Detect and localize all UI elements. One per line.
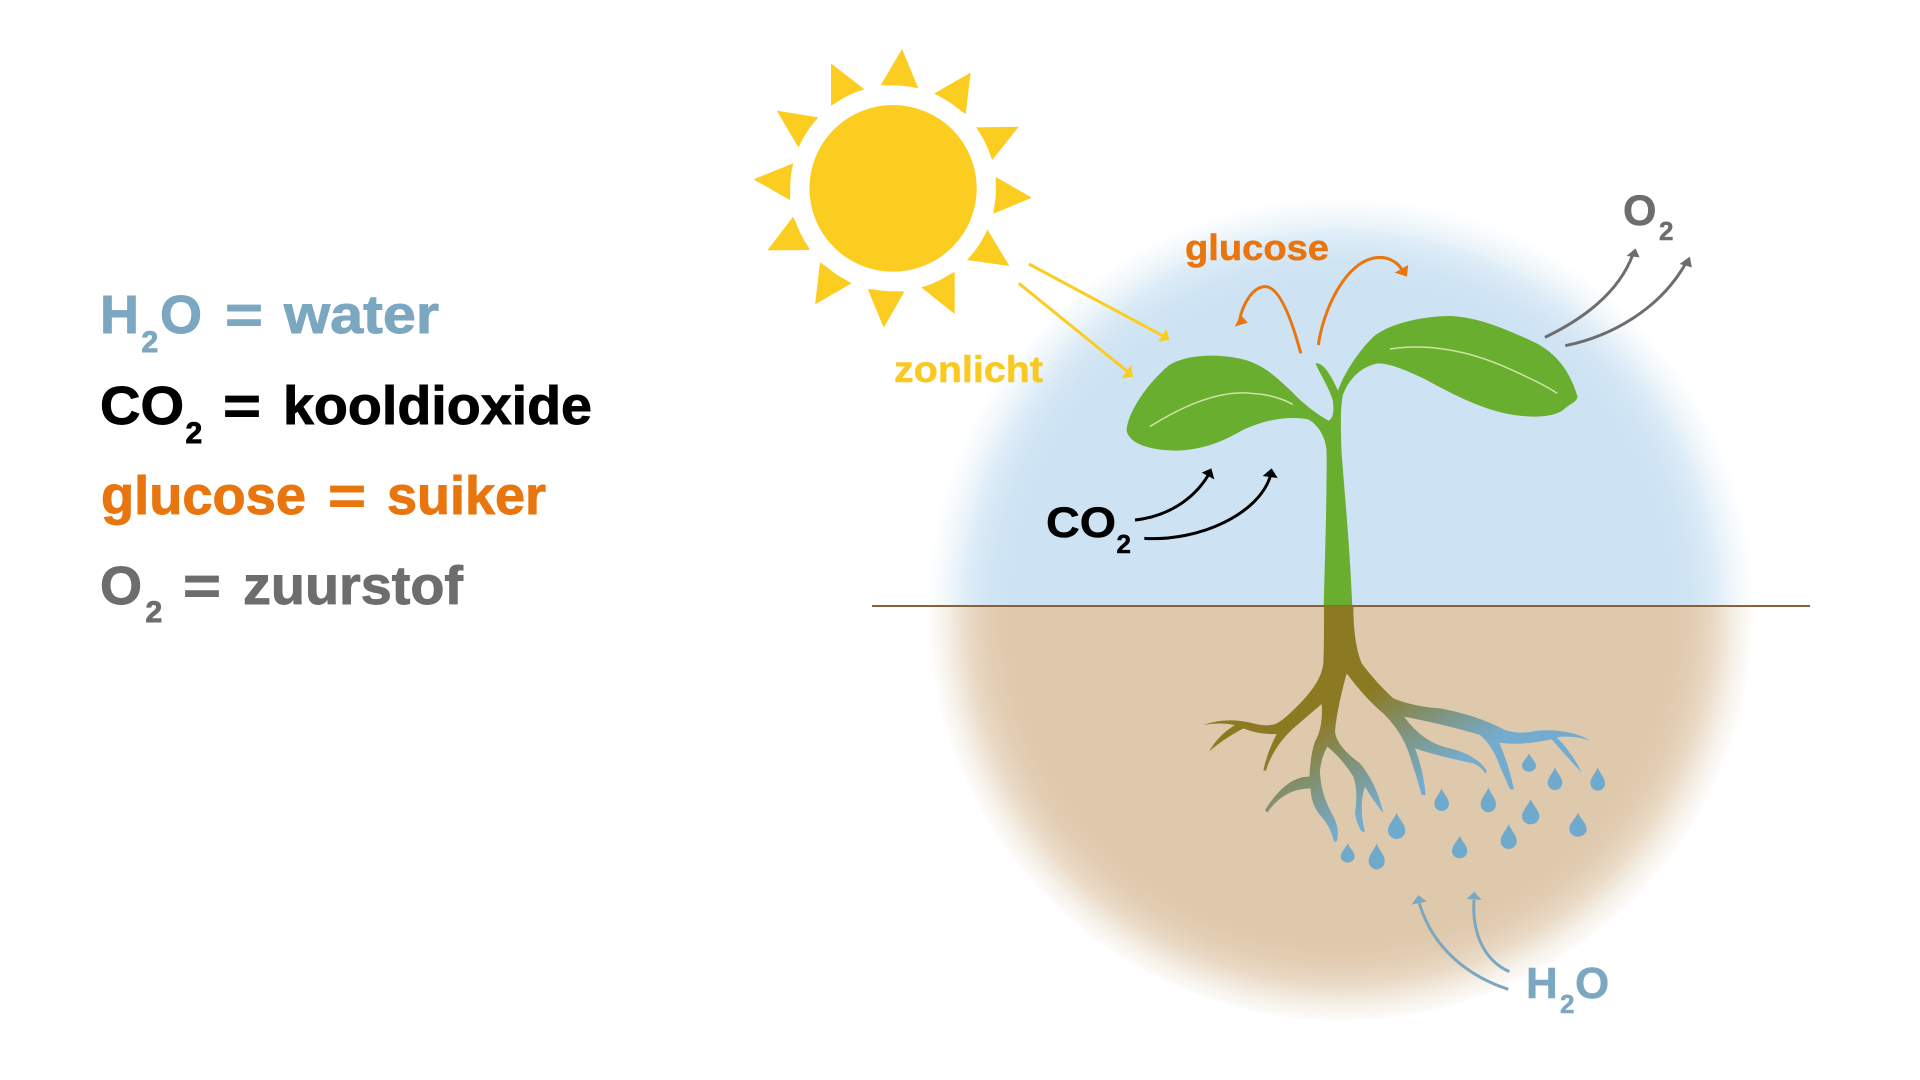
legend: zuurstof: 2 [146,596,162,629]
legend: suiker: glucose [101,466,306,526]
label: O2: O [1623,187,1656,235]
label: O2: 2 [1659,216,1673,246]
water drops [1341,753,1605,869]
label: CO2: 2 [1116,529,1131,559]
label: H2O: O [1575,959,1609,1008]
arrows: carbon dioxide [1135,468,1278,539]
legend [100,285,592,629]
label: CO2 [1046,499,1131,559]
legend: suiker [101,466,546,526]
arrows: oxygen [1545,248,1692,346]
label: O2 [1623,187,1673,246]
legend: kooldioxide: = [223,376,261,436]
sky half circle [927,192,1755,606]
legend: kooldioxide [100,376,592,450]
label: zonlicht: zonlicht [894,349,1043,390]
label: glucose: glucose [1185,227,1329,268]
legend: kooldioxide: CO [100,376,184,436]
legend: zuurstof: O [100,556,142,616]
legend: water [100,285,439,359]
legend: zuurstof: zuurstof [243,556,464,616]
legend: kooldioxide: 2 [186,417,202,450]
label: H2O: H [1526,959,1558,1008]
label: H2O: 2 [1560,989,1574,1019]
legend: kooldioxide: kooldioxide [283,376,592,436]
legend: water: water [283,285,439,345]
legend: zuurstof: = [183,556,221,616]
soil half circle [927,606,1755,1020]
label: H2O [1526,959,1609,1019]
legend: water: H [100,285,139,345]
legend: water: O [160,285,202,345]
legend: suiker: = [328,466,366,526]
legend: zuurstof [100,556,464,629]
icon: sun [753,49,1032,328]
arrows: water [1412,892,1509,989]
label: CO2: CO [1046,499,1116,547]
legend: suiker: suiker [387,466,546,526]
leaf veins [1150,347,1557,427]
arrows: sunlight [1019,264,1169,378]
roots [1203,606,1590,842]
ground line [872,605,1810,607]
legend: water: 2 [142,326,158,359]
legend: water: = [225,285,263,345]
plant stem and leaves [1127,316,1578,606]
roots and water drops [1203,606,1605,869]
arrows: glucose [1235,257,1408,353]
